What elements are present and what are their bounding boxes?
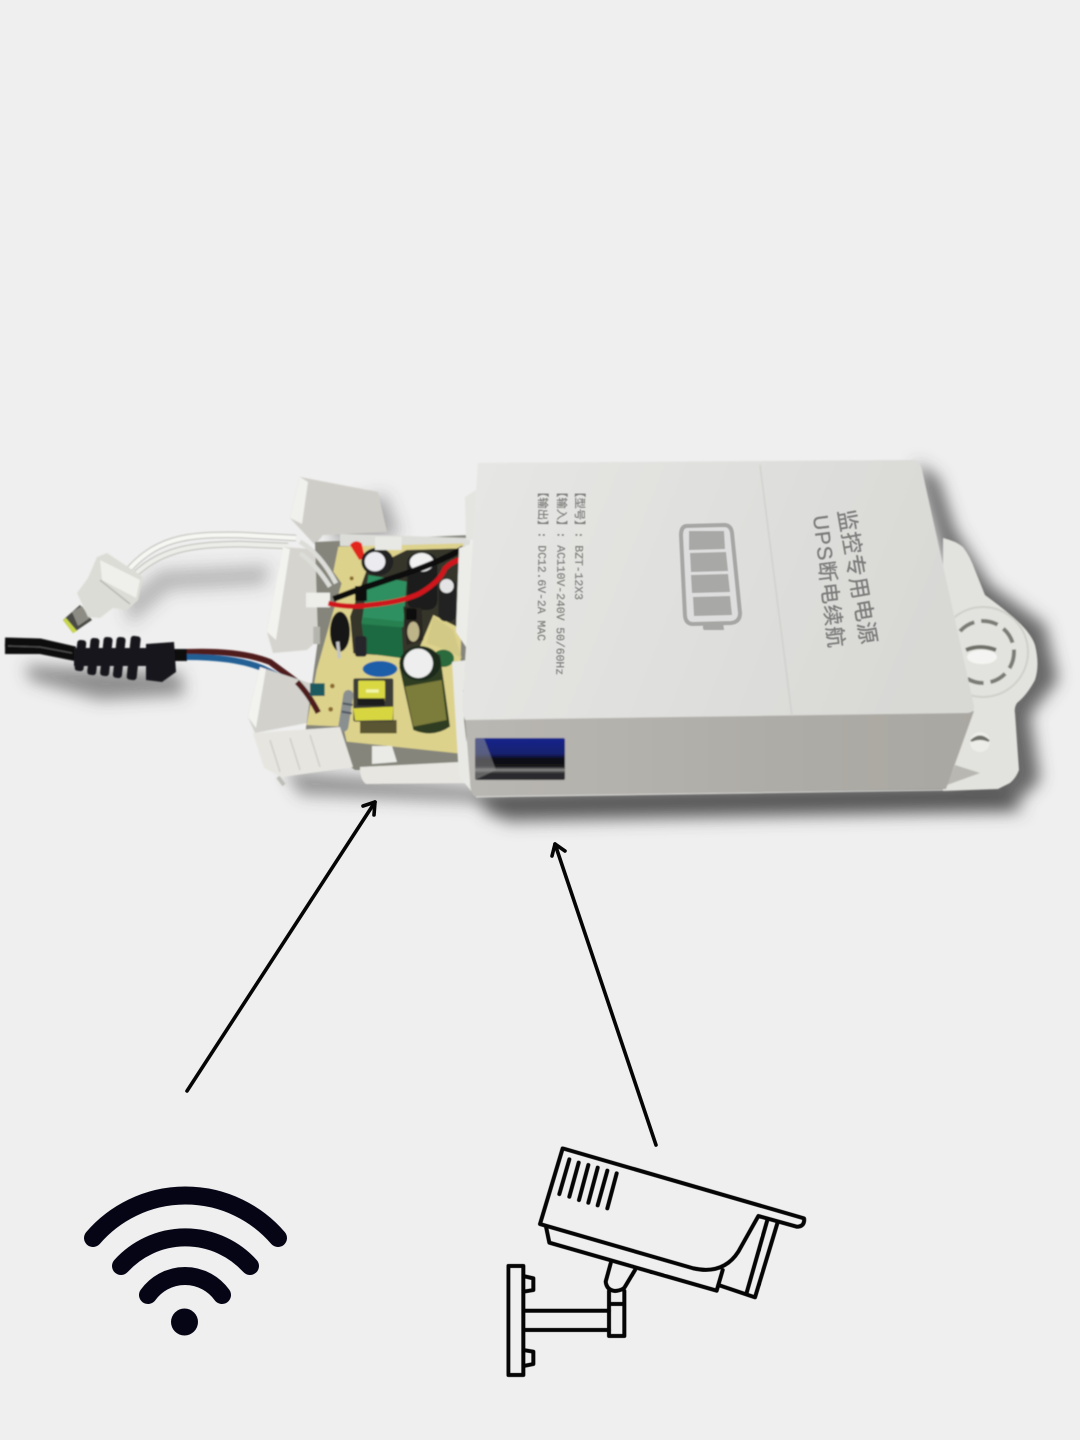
arrow: wifi to circuit board [187, 802, 375, 1091]
transformer [362, 623, 403, 658]
battery window [475, 738, 565, 780]
ferrite core [403, 607, 423, 645]
resistor [343, 695, 348, 727]
printed title label: 监控专用电源 [833, 508, 881, 647]
black and coloured input cable [5, 636, 297, 685]
mains wire end [297, 682, 318, 713]
housing clips [253, 727, 470, 785]
printed title label [808, 508, 881, 650]
mounting plate [938, 538, 1038, 791]
open housing walls [248, 477, 470, 772]
blue disc capacitor [363, 661, 397, 677]
circuit board [297, 537, 463, 753]
box top and front [462, 460, 974, 797]
printed specification label: 【型号】: BZT-12X3 [571, 486, 587, 600]
printed title label: UPS断电续航 [808, 514, 847, 650]
icon: wifi [93, 1196, 278, 1336]
product photo: UPS power supply [5, 460, 1058, 823]
white DC output cable and plug [63, 535, 296, 633]
diode [330, 612, 350, 652]
printed battery icon [681, 525, 740, 630]
red LED [350, 541, 365, 560]
holes [330, 684, 335, 688]
plug connector [306, 593, 330, 607]
white wires inside [300, 542, 336, 587]
yellow inductor [360, 720, 397, 733]
icon: security camera [508, 1148, 804, 1375]
red wire [328, 558, 463, 606]
printed specification label: 【输入】: AC110V-240V 50/60Hz [552, 486, 569, 675]
capacitors [361, 548, 393, 576]
printed specification label: 【输出】: DC12.6V-2A MAC [534, 486, 550, 641]
large capacitor [433, 650, 454, 667]
black wire [333, 548, 463, 599]
printed specification label [534, 486, 587, 675]
cast shadows [25, 462, 1058, 823]
box side rail [452, 490, 476, 792]
arrow: camera to power supply [552, 844, 656, 1145]
